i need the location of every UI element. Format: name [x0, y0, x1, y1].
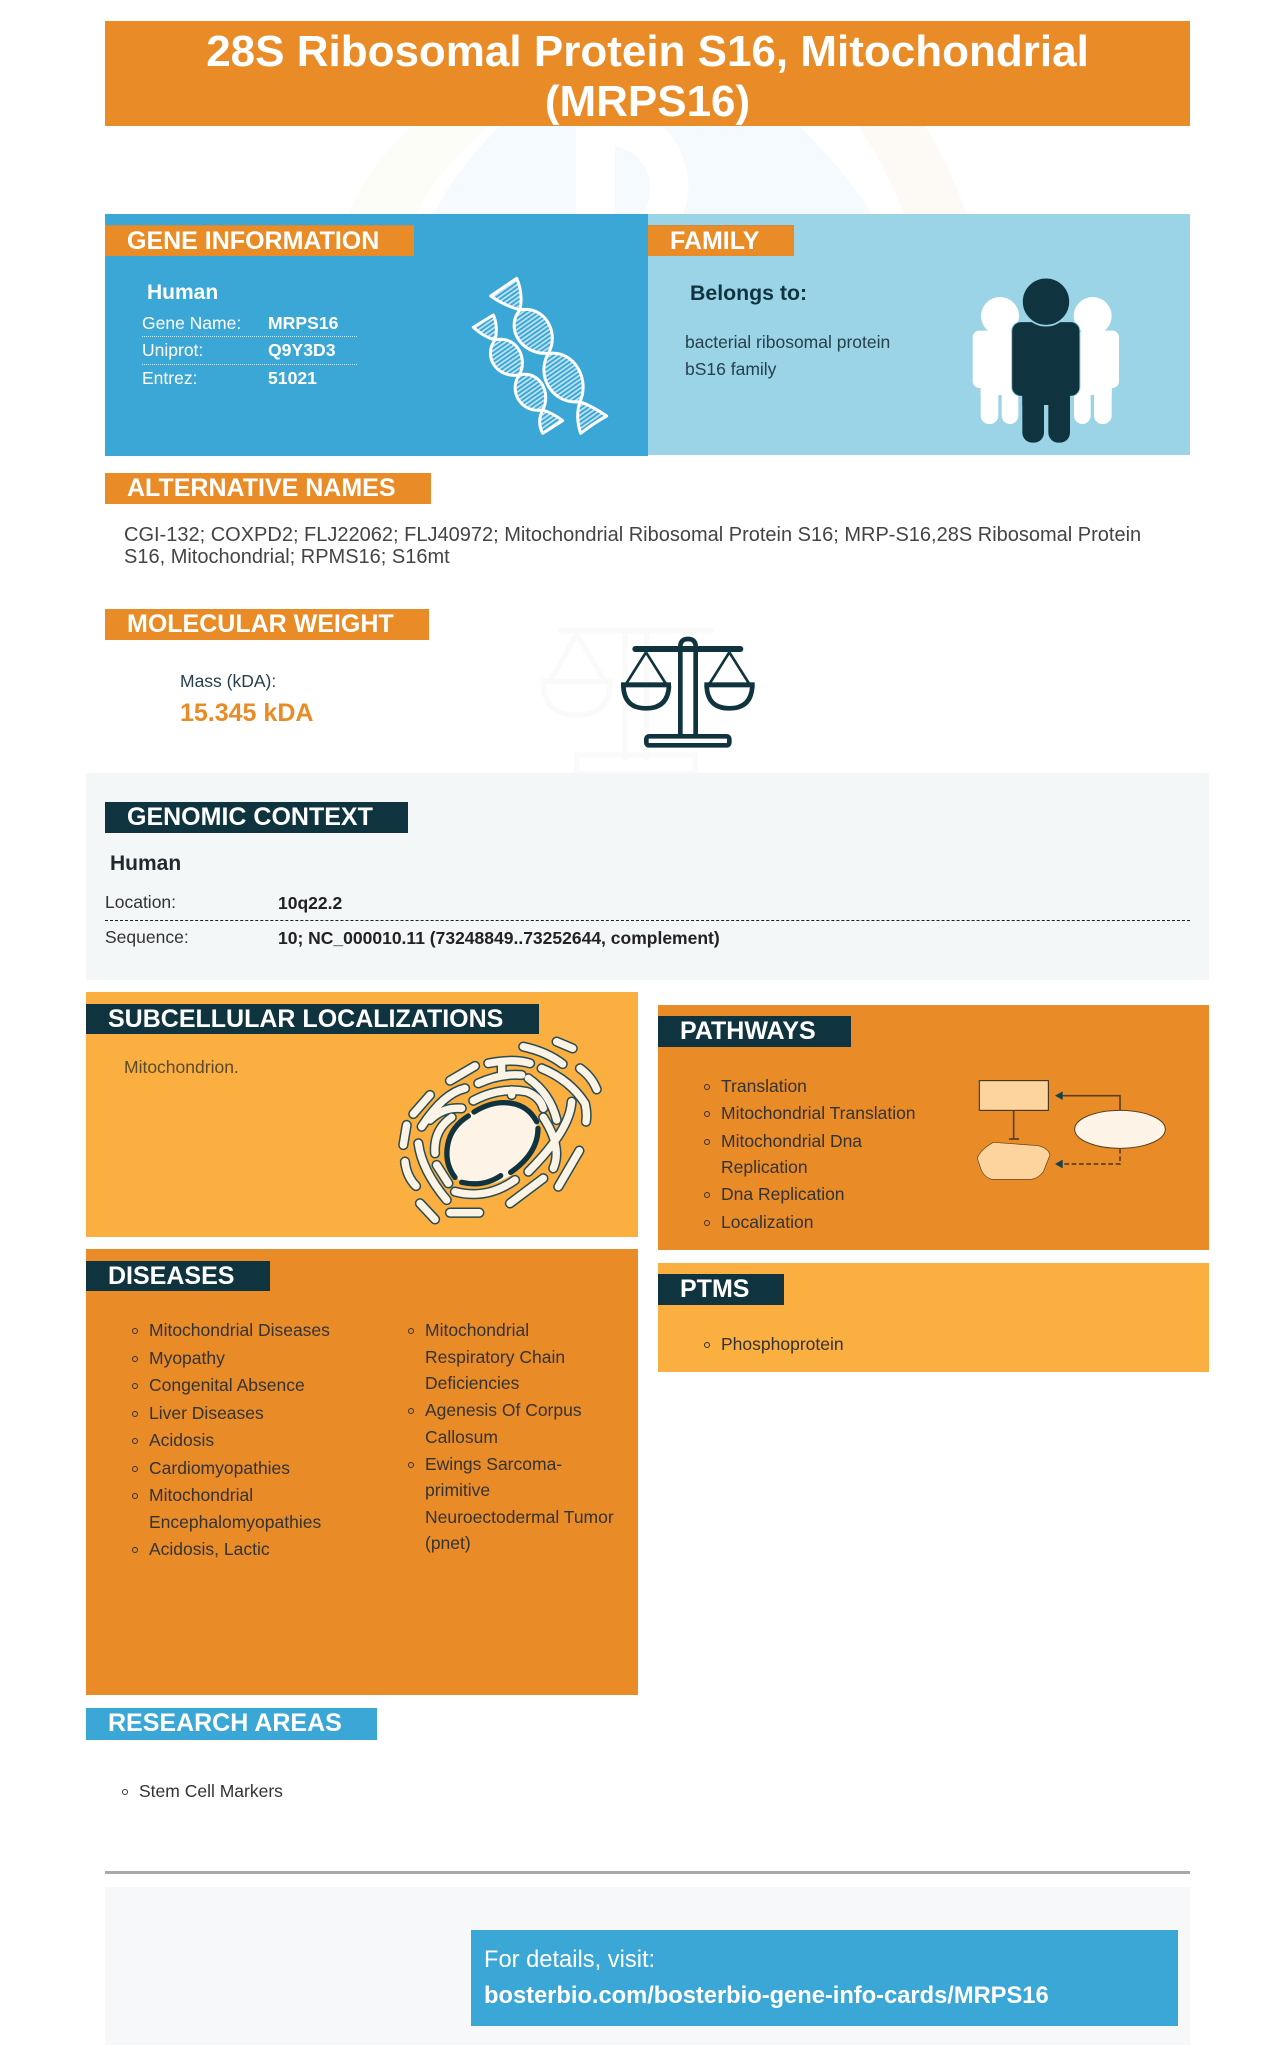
mass label: Mass (kDA):	[180, 671, 276, 691]
genomic table: Location:	[105, 892, 176, 912]
pathways list: Translation	[721, 1076, 807, 1096]
alternative names text: CGI-132; COXPD2; FLJ22062; FLJ40972; Mitochondrial Ribosomal Protein S16; MRP-S16,28S Ribosomal Protein	[124, 524, 1141, 546]
heading: pathways: PATHWAYS	[680, 1017, 816, 1045]
diseases list column 2	[408, 1320, 614, 1553]
title text: (MRPS16)	[545, 77, 750, 126]
title banner	[105, 21, 1190, 126]
icon: pathway diagram	[977, 1080, 1166, 1180]
heading: ptms: PTMS	[680, 1275, 749, 1303]
gene info table	[142, 313, 357, 388]
heading: diseases	[86, 1261, 270, 1291]
research areas list: Stem Cell Markers	[139, 1781, 283, 1801]
gene info table: Q9Y3D3	[268, 340, 335, 360]
diseases list column 1: Myopathy	[149, 1348, 225, 1368]
icon: mitochondrion	[398, 1036, 602, 1224]
footer rule	[105, 1871, 1190, 1874]
heading: molecular weight: MOLECULAR WEIGHT	[127, 610, 394, 638]
heading: pathways	[658, 1016, 851, 1047]
diseases list column 2: (pnet)	[425, 1533, 471, 1553]
diseases list column 2: Neuroectodermal Tumor	[425, 1507, 614, 1527]
panel: genomic context	[86, 773, 1209, 980]
localization text: Mitochondrion.	[124, 1057, 239, 1077]
alternative names text: S16, Mitochondrial; RPMS16; S16mt	[124, 546, 450, 568]
diseases list column 1: Acidosis	[149, 1430, 214, 1450]
panel: diseases	[86, 1249, 638, 1695]
diseases list column 2: primitive	[425, 1480, 490, 1500]
family text: bacterial ribosomal protein	[685, 332, 890, 352]
panel: pathways	[658, 1005, 1209, 1250]
diseases list column 1: Encephalomyopathies	[149, 1512, 321, 1532]
diseases list column 2: Deficiencies	[425, 1373, 519, 1393]
diseases list column 2: Callosum	[425, 1427, 498, 1447]
family text: bS16 family	[685, 359, 776, 379]
mass value: 15.345 kDA	[180, 699, 313, 727]
species label: Human	[147, 281, 218, 304]
panel: ptms	[658, 1263, 1209, 1372]
panel: subcellular localizations	[86, 992, 638, 1237]
heading: ptms	[658, 1274, 784, 1305]
icon: balance scale	[621, 636, 755, 748]
alternative names text	[124, 524, 1141, 568]
gene info table: Uniprot:	[142, 340, 203, 360]
diseases list column 1: Mitochondrial	[149, 1485, 253, 1505]
diseases list column 2: Mitochondrial	[425, 1320, 529, 1340]
diseases list column 1	[132, 1320, 330, 1559]
diseases list column 1: Congenital Absence	[149, 1375, 305, 1395]
family text	[685, 332, 890, 379]
pathways list: Replication	[721, 1157, 808, 1177]
callout: details link	[471, 1930, 1178, 2026]
genomic table: 10q22.2	[278, 893, 342, 913]
heading: family: FAMILY	[670, 227, 759, 255]
pathways list: Mitochondrial Translation	[721, 1103, 916, 1123]
species label: Human	[110, 852, 181, 875]
diseases list column 2: Agenesis Of Corpus	[425, 1400, 582, 1420]
diseases list column 1: Liver Diseases	[149, 1403, 264, 1423]
gene info table: Gene Name:	[142, 313, 241, 333]
genomic table	[105, 892, 1190, 948]
diseases list column 1: Acidosis, Lactic	[149, 1539, 270, 1559]
heading: family	[648, 225, 794, 256]
diseases list column 1: Mitochondrial Diseases	[149, 1320, 330, 1340]
pathways list: Localization	[721, 1212, 813, 1232]
icon: people	[972, 278, 1119, 443]
pathways list	[704, 1076, 916, 1232]
heading: gene information: GENE INFORMATION	[127, 227, 379, 255]
panel: gene information	[105, 214, 648, 456]
callout text	[484, 1947, 1049, 2009]
ptms list: Phosphoprotein	[721, 1334, 844, 1354]
pathways list: Mitochondrial Dna	[721, 1131, 862, 1151]
heading: diseases: DISEASES	[108, 1262, 234, 1290]
diseases list column 1: Cardiomyopathies	[149, 1458, 290, 1478]
icon: DNA	[472, 276, 608, 435]
genomic table: Sequence:	[105, 927, 189, 947]
diseases list column 2: Ewings Sarcoma-	[425, 1454, 562, 1474]
gene info table: 51021	[268, 368, 317, 388]
watermark scale	[530, 620, 790, 780]
title text: 28S Ribosomal Protein S16, Mitochondrial	[206, 27, 1089, 76]
heading: alternative names: ALTERNATIVE NAMES	[127, 474, 396, 502]
callout text: For details, visit:	[484, 1947, 655, 1973]
watermark logo	[434, 126, 966, 214]
pathways list: Dna Replication	[721, 1184, 845, 1204]
panel: footer	[105, 1887, 1190, 2045]
callout text: bosterbio.com/bosterbio-gene-info-cards/MRPS16	[484, 1983, 1049, 2009]
heading: genomic context: GENOMIC CONTEXT	[127, 803, 373, 831]
gene info table: MRPS16	[268, 313, 338, 333]
panel: family	[648, 214, 1190, 455]
gene info table: Entrez:	[142, 368, 197, 388]
belongs to label: Belongs to:	[690, 281, 807, 305]
diseases list column 2: Respiratory Chain	[425, 1347, 565, 1367]
genomic table: 10; NC_000010.11 (73248849..73252644, complement)	[278, 928, 720, 948]
heading: research areas: RESEARCH AREAS	[108, 1709, 342, 1737]
title text	[206, 27, 1089, 126]
heading: subcellular localizations: SUBCELLULAR LOCALIZATIONS	[108, 1005, 503, 1033]
